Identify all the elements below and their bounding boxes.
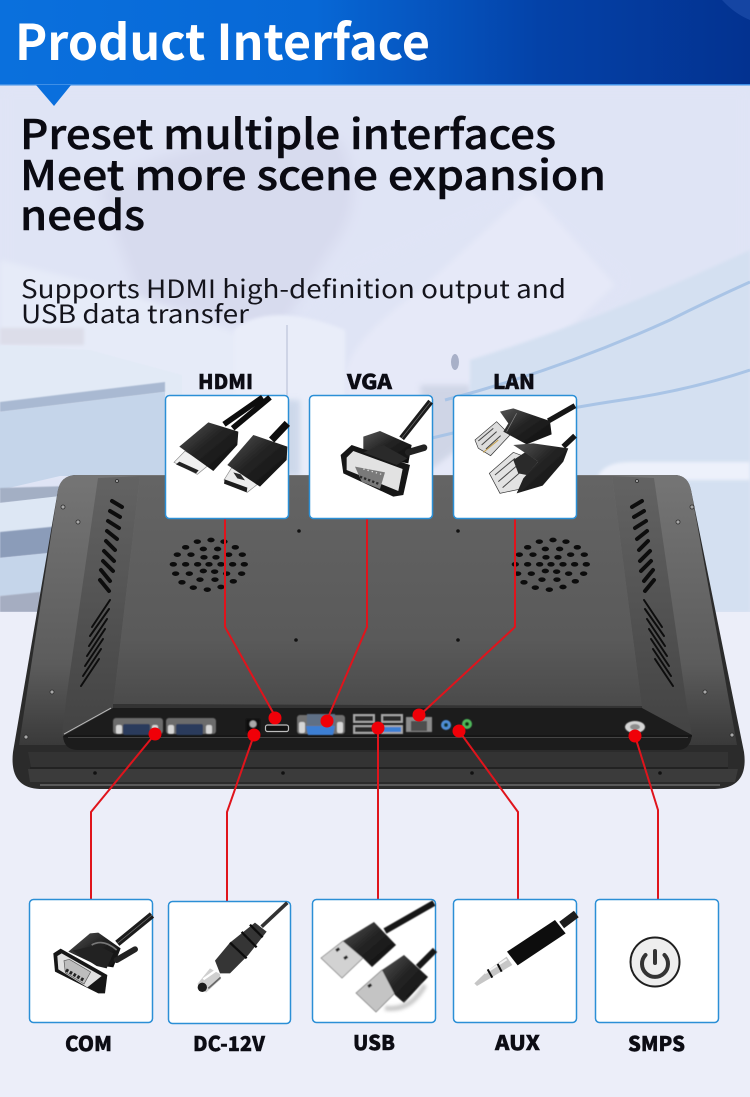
- line: LAN: [420, 518, 515, 715]
- card: SMPS power button: [596, 900, 718, 1022]
- ports: audio jacks: [441, 719, 472, 730]
- port: HDMI socket: [266, 725, 288, 732]
- right speaker grille: [512, 538, 590, 592]
- card: AUX cable: [454, 900, 576, 1022]
- bottom labels: SMPS: [628, 1028, 685, 1057]
- line: HDMI: [225, 518, 275, 716]
- screws and mounting holes: [24, 480, 734, 775]
- right vent strip: [612, 476, 692, 736]
- subheading text: [21, 270, 566, 331]
- card: VGA cable: [310, 396, 432, 518]
- line: VGA: [327, 518, 367, 720]
- lower chassis layers: [28, 752, 728, 767]
- line: USB: [377, 728, 379, 899]
- background photo: medical robot arm scene: [0, 85, 750, 612]
- port: power button: [625, 721, 645, 733]
- panel PC rear view: [13, 475, 745, 789]
- headline: Preset multiple interfaces: [20, 101, 556, 161]
- subheading text: USB data transfer: [21, 295, 249, 331]
- card: USB cable: [312, 900, 436, 1022]
- line: COM: [91, 734, 155, 899]
- subheading text: Supports HDMI high-definition output and: [21, 270, 566, 306]
- bottom labels: USB: [353, 1027, 395, 1056]
- header band: [0, 0, 750, 106]
- card: DC-12V cable: [168, 902, 290, 1024]
- port: VGA socket: [297, 714, 345, 735]
- ports: USB sockets: [353, 714, 403, 734]
- card: LAN cable: [454, 396, 576, 518]
- top labels: [198, 366, 535, 395]
- icon: DC barrel plug: [197, 903, 287, 993]
- top labels: VGA: [346, 366, 393, 395]
- header pointer triangle: [36, 85, 71, 106]
- icon: power button: [630, 938, 680, 986]
- headline: Meet more scene expansion: [20, 142, 606, 202]
- port strip: [63, 708, 692, 750]
- top labels: HDMI: [198, 366, 253, 395]
- card: COM cable: [30, 900, 152, 1022]
- icon: RJ45 plugs: [475, 406, 575, 493]
- icon: USB plugs: [321, 903, 435, 1012]
- bottom labels: DC-12V: [193, 1028, 266, 1057]
- bottom labels: COM: [65, 1028, 112, 1057]
- headline: needs: [20, 182, 145, 242]
- headline: [20, 101, 606, 242]
- bottom labels: [65, 1027, 685, 1057]
- icon: VGA plug: [341, 402, 431, 497]
- ports: COM serial connectors: [113, 718, 216, 735]
- port: LAN socket: [406, 717, 432, 732]
- line: AUX: [459, 731, 518, 899]
- connector lines and red dots: [91, 518, 658, 901]
- left vent strip: [62, 476, 140, 736]
- icon: audio jack: [474, 914, 576, 986]
- title: Product Interface: [15, 4, 430, 75]
- red connection dots: [148, 708, 642, 742]
- left speaker grille: [170, 538, 248, 592]
- central panel: [113, 476, 642, 708]
- left vent slots: [81, 501, 122, 686]
- port: DC jack: [246, 719, 260, 732]
- bottom labels: AUX: [494, 1027, 540, 1056]
- icon: serial plug: [53, 915, 152, 993]
- right vent slots: [632, 501, 673, 686]
- line: DC-12V: [227, 735, 254, 901]
- top labels: LAN: [493, 366, 535, 395]
- card: HDMI cable: [166, 396, 288, 518]
- line: SMPS: [635, 736, 658, 899]
- icon: HDMI plugs: [174, 397, 287, 492]
